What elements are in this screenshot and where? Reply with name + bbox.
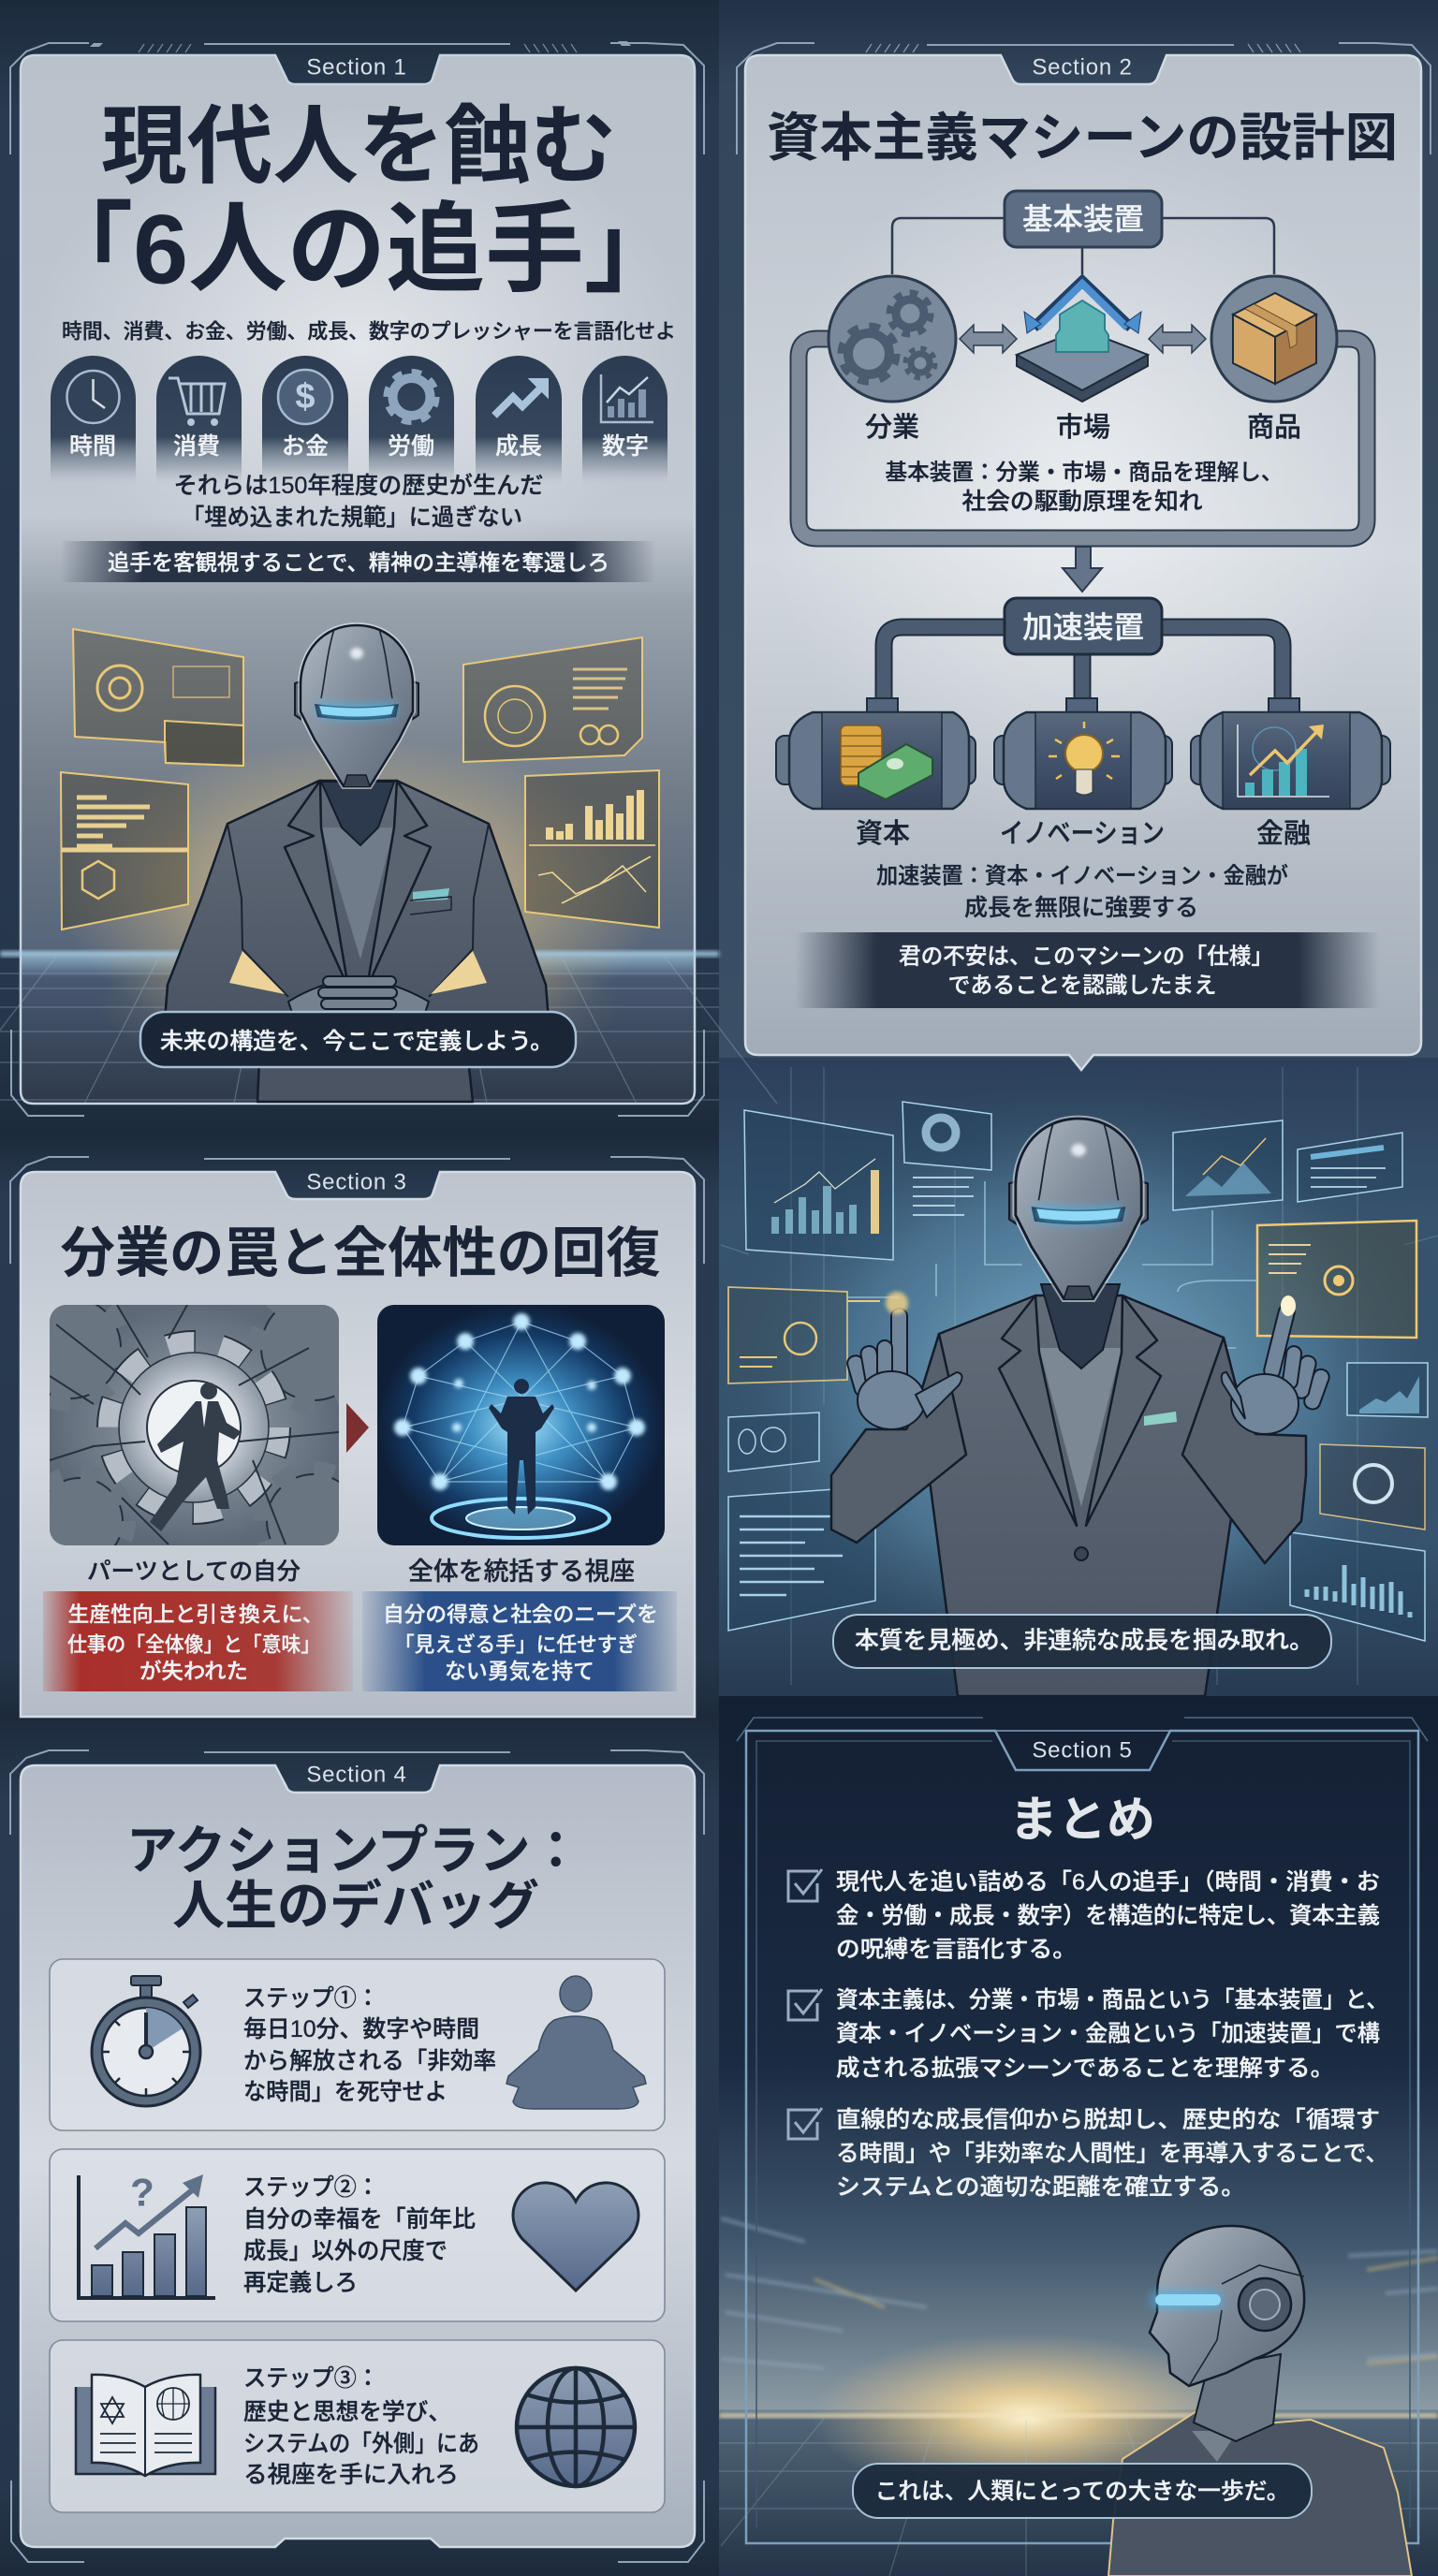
red message box bbox=[43, 1591, 353, 1691]
step 2 text: 再定義しろ bbox=[243, 2270, 358, 2296]
subtitle: 時間、消費、お金、労働、成長、数字のプレッシャーを言語化せよ bbox=[62, 320, 676, 343]
summary 3 bbox=[788, 2106, 1388, 2200]
pursuer: numbers bbox=[582, 356, 668, 487]
caption pill bbox=[853, 2464, 1312, 2518]
step 2 text: 自分の幸福を「前年比 bbox=[243, 2206, 476, 2232]
step 3 text: る視座を手に入れろ bbox=[243, 2462, 459, 2488]
section 3 frame bbox=[10, 1157, 704, 1264]
section 5 title: まとめ bbox=[1009, 1793, 1155, 1848]
head bbox=[1150, 2226, 1304, 2386]
red message box: 仕事の「全体像」と「意味」 bbox=[67, 1632, 320, 1657]
fingertip glows bbox=[886, 1292, 908, 1314]
robot hands bbox=[845, 1292, 1331, 1434]
step 3 text: ステップ③： bbox=[243, 2365, 379, 2392]
section 4 frame bbox=[10, 1750, 704, 2562]
visor bbox=[1152, 2293, 1222, 2306]
step 3 text bbox=[243, 2365, 479, 2488]
scene: robot pointing at dashboards bbox=[688, 1067, 1438, 1704]
summary 1 text bbox=[836, 1868, 1380, 1962]
base device label bbox=[1005, 191, 1162, 247]
holo panel top left bbox=[73, 629, 243, 766]
step 2 bbox=[50, 2149, 665, 2321]
summary 1 text: の呪縛を言語化する。 bbox=[836, 1936, 1077, 1962]
data streams bbox=[721, 1067, 1438, 1685]
section 1 card bbox=[21, 55, 695, 1104]
accelerator label bbox=[1005, 598, 1162, 654]
step 1 text: から解放される「非効率 bbox=[243, 2048, 496, 2074]
dark banner: 追手を客観視することで、精神の主導権を奪還しろ bbox=[108, 550, 609, 575]
accelerator names: 金融 bbox=[1256, 818, 1311, 849]
cylinder: capital bbox=[776, 698, 976, 809]
accelerator label: 加速装置 bbox=[1022, 610, 1144, 644]
step 3 bbox=[50, 2340, 665, 2512]
summary 3 text bbox=[836, 2106, 1388, 2200]
horizon bbox=[719, 2413, 1438, 2418]
checkbox bbox=[788, 1989, 822, 2020]
raised right arm bbox=[1182, 1338, 1306, 1563]
icon: open book bbox=[76, 2375, 215, 2476]
section 1 frame bbox=[10, 41, 704, 1116]
summary 2 text: 資本主義は、分業・市場・商品という「基本装置」と、 bbox=[836, 1986, 1388, 2012]
pursuer: labor: 労働 bbox=[388, 433, 434, 460]
section label: Section 2 bbox=[1032, 54, 1133, 80]
dashboard: dial bbox=[1320, 1444, 1425, 1530]
section label: Section 1 bbox=[306, 54, 407, 80]
section 5 frame bbox=[737, 1718, 1428, 2543]
section 3 panel bbox=[10, 1157, 704, 1717]
base device description: 社会の駆動原理を知れ bbox=[962, 489, 1202, 515]
dashboard: bar chart bbox=[744, 1110, 893, 1260]
pursuer: time: 時間 bbox=[69, 433, 116, 460]
summary 3 text: る時間」や「非効率な人間性」を再導入することで、 bbox=[836, 2140, 1388, 2166]
section 4 title: アクションプラン： bbox=[126, 1822, 581, 1880]
right hand bbox=[1222, 1303, 1331, 1434]
blue message box: 自分の得意と社会のニーズを bbox=[383, 1603, 658, 1627]
caption pill bbox=[833, 1615, 1331, 1668]
pocket bbox=[410, 897, 451, 915]
section 4 card bbox=[21, 1765, 695, 2547]
caption pill: 本質を見極め、非連続な成長を掴み取れ。 bbox=[855, 1628, 1313, 1654]
icon: stopwatch bbox=[92, 1976, 200, 2106]
division of labor icon bbox=[829, 276, 956, 402]
summary 1 text: 現代人を追い詰める「6人の追手」（時間・消費・お bbox=[836, 1868, 1380, 1895]
blue message box: ない勇気を持て bbox=[445, 1659, 594, 1683]
dashboard: spark bbox=[1347, 1363, 1428, 1417]
summary 3 text: 直線的な成長信仰から脱却し、歴史的な「循環す bbox=[836, 2106, 1380, 2132]
dashboard: donut bbox=[902, 1102, 991, 1170]
section 3 title: 分業の罠と全体性の回復 bbox=[60, 1222, 660, 1284]
base device names: 商品 bbox=[1247, 412, 1301, 443]
dark banner bbox=[60, 541, 655, 582]
holo panel top right bbox=[463, 637, 642, 762]
pursuer: labor bbox=[369, 356, 454, 487]
section 4 panel bbox=[10, 1750, 704, 2562]
accelerator description: 成長を無限に強要する bbox=[964, 895, 1198, 921]
section 1 light bloom bbox=[32, 103, 687, 590]
base device names bbox=[865, 412, 1301, 443]
neck bbox=[321, 782, 394, 845]
section 4 title: 人生のデバッグ bbox=[172, 1876, 539, 1936]
icon: growth chart: ? bbox=[130, 2170, 154, 2215]
robot presenter bbox=[165, 625, 549, 1102]
jacket button bbox=[1075, 1547, 1088, 1560]
image: global network bbox=[377, 1305, 665, 1545]
icon: growth chart bbox=[79, 2170, 215, 2298]
summary 2 text: 成される拡張マシーンであることを理解する。 bbox=[836, 2056, 1334, 2082]
goods icon bbox=[1211, 276, 1337, 402]
accelerator names: イノベーション bbox=[1000, 819, 1165, 849]
red message box: が失われた bbox=[139, 1659, 248, 1683]
base device names: 分業 bbox=[865, 412, 919, 443]
section 2 banner: 君の不安は、このマシーンの「仕様」 bbox=[899, 944, 1273, 970]
man bbox=[150, 1383, 242, 1531]
accelerator description bbox=[876, 863, 1288, 921]
pursuer: time bbox=[51, 356, 136, 487]
raised left arm bbox=[831, 1334, 966, 1543]
step 3 text: 歴史と思想を学び、 bbox=[243, 2399, 451, 2425]
summary 3 text: システムとの適切な距離を確立する。 bbox=[836, 2174, 1245, 2200]
pursuer: consumption: 消費 bbox=[173, 433, 220, 460]
warm floor reflection bbox=[97, 931, 622, 1081]
blue message box: 「見えざる手」に任せすぎ bbox=[394, 1632, 638, 1657]
sunrise bbox=[822, 2338, 1202, 2466]
floor grid bbox=[719, 2419, 1438, 2576]
lapels bbox=[999, 1295, 1161, 1526]
step 1 text: 毎日10分、数字や時間 bbox=[243, 2016, 479, 2042]
connector lines bbox=[847, 1181, 1257, 1348]
checkbox bbox=[788, 2108, 822, 2139]
checkbox bbox=[788, 1869, 822, 1901]
left caption: パーツとしての自分 bbox=[87, 1559, 301, 1585]
summary 2 bbox=[788, 1986, 1388, 2082]
cracks bbox=[50, 1305, 339, 1544]
base device label: 基本装置 bbox=[1022, 202, 1144, 236]
section label: Section 3 bbox=[306, 1170, 407, 1194]
section 2 title: 資本主義マシーンの設計図 bbox=[767, 109, 1398, 167]
base device connectors bbox=[892, 218, 1274, 274]
step 1 text bbox=[243, 1985, 496, 2105]
blue message box bbox=[362, 1591, 677, 1691]
pursuer: money bbox=[262, 356, 348, 487]
double arrows bbox=[960, 325, 1206, 353]
summary 1 text: 金・労働・成長・数字）を構造的に特定し、資本主義 bbox=[836, 1902, 1380, 1928]
section 2 panel bbox=[737, 43, 1431, 1070]
arm seams bbox=[227, 824, 489, 997]
section 2 banner bbox=[795, 932, 1380, 1008]
jacket bbox=[1108, 2403, 1412, 2576]
section 1 title: 「6人の追手」 bbox=[34, 195, 683, 305]
warm gaps under arms bbox=[229, 951, 487, 994]
section 2 frame bbox=[737, 43, 1431, 154]
left hand bbox=[845, 1309, 962, 1429]
accelerator names: 資本 bbox=[856, 818, 910, 849]
section 2 banner: であることを認識したまえ bbox=[947, 973, 1217, 998]
dashboard: table bbox=[1298, 1133, 1402, 1202]
neck bbox=[1194, 2354, 1281, 2441]
accelerator description: 加速装置：資本・イノベーション・金融が bbox=[876, 863, 1288, 889]
base device description: 基本装置：分業・市場・商品を理解し、 bbox=[886, 461, 1283, 485]
accelerator pipes bbox=[884, 627, 1283, 702]
right caption: 全体を統括する視座 bbox=[408, 1558, 635, 1586]
section 4 title bbox=[126, 1822, 581, 1936]
dashboard: code bbox=[728, 1486, 875, 1631]
accelerator names bbox=[856, 818, 1311, 849]
pocket square bbox=[1144, 1412, 1177, 1426]
summary 2 text: 資本・イノベーション・金融という「加速装置」で構 bbox=[836, 2020, 1380, 2046]
shirt bbox=[1192, 2431, 1238, 2462]
cylinder: finance bbox=[1191, 698, 1390, 809]
section 5 background bbox=[719, 1696, 1438, 2576]
warm glow behind robot bbox=[60, 739, 659, 1058]
central gear bbox=[109, 1342, 279, 1513]
base device names: 市場 bbox=[1056, 412, 1110, 443]
section 1 title: 現代人を蝕む bbox=[101, 99, 616, 195]
step 3 text: システムの「外側」にあ bbox=[243, 2431, 479, 2457]
section label: Section 5 bbox=[1032, 1737, 1133, 1764]
arrow bbox=[346, 1403, 369, 1453]
robot suit bbox=[831, 1284, 1306, 1696]
market icon bbox=[1017, 281, 1148, 402]
holo panel bottom right bbox=[525, 770, 659, 928]
six pursuers row bbox=[51, 356, 668, 487]
corner gears bbox=[50, 1305, 339, 1545]
dashboard: golden left bbox=[728, 1287, 880, 1383]
section 2 light bloom bbox=[764, 131, 1401, 842]
section 1 title bbox=[34, 99, 683, 305]
history text: 「埋め込まれた規範」に過ぎない bbox=[182, 505, 522, 531]
loop pipe bbox=[799, 339, 1367, 538]
step 1 bbox=[50, 1959, 665, 2130]
pursuer: growth bbox=[476, 356, 562, 487]
clasped hands bbox=[288, 976, 429, 1018]
icon: heart bbox=[513, 2183, 638, 2291]
shirt bbox=[1039, 1348, 1122, 1507]
horizon and floor grid bbox=[0, 951, 777, 1104]
step 1 text: な時間」を死守せよ bbox=[243, 2079, 448, 2105]
history text bbox=[174, 473, 543, 531]
data streaks bbox=[721, 2218, 1438, 2368]
holo panel bottom left bbox=[61, 772, 188, 929]
pursuer: numbers: 数字 bbox=[602, 433, 649, 460]
dashboard: lower right bars bbox=[1290, 1532, 1425, 1641]
step 1 text: ステップ①： bbox=[243, 1985, 379, 2012]
section 3 card bbox=[21, 1172, 695, 1717]
pocket square bbox=[413, 888, 449, 901]
robot jacket and arms bbox=[165, 781, 549, 1102]
robot head bbox=[295, 625, 418, 786]
dashboard: mountain chart bbox=[1173, 1120, 1283, 1210]
red message box: 生産性向上と引き換えに、 bbox=[67, 1603, 324, 1627]
icon: globe bbox=[517, 2368, 635, 2486]
image: trapped in gears bbox=[50, 1305, 339, 1545]
dashboard: golden panel bbox=[1257, 1221, 1416, 1338]
flow arrow bbox=[1063, 547, 1102, 592]
pursuer: consumption bbox=[156, 356, 242, 487]
cylinder: innovation bbox=[994, 698, 1172, 809]
lapels bbox=[285, 781, 431, 988]
caption pill bbox=[140, 1012, 576, 1067]
pursuer: money: お金 bbox=[282, 433, 329, 460]
robot head bbox=[1009, 1119, 1148, 1299]
icon: meditation bbox=[506, 1976, 646, 2109]
golden holo panels bbox=[61, 629, 659, 929]
section 1 panel bbox=[0, 41, 777, 1116]
robot in profile bbox=[1108, 2226, 1412, 2576]
dashboards bbox=[728, 1102, 1428, 1641]
neck bbox=[1041, 1284, 1120, 1368]
section 2 card bbox=[745, 55, 1421, 1070]
step 2 text bbox=[243, 2174, 476, 2296]
helmet seam bbox=[1189, 2265, 1304, 2386]
summary 2 text bbox=[836, 1986, 1388, 2082]
caption pill: これは、人類にとっての大きな一歩だ。 bbox=[874, 2479, 1290, 2505]
history text: それらは150年程度の歴史が生んだ bbox=[174, 473, 543, 499]
ear module bbox=[1239, 2278, 1291, 2331]
caption pill: 未来の構造を、今ここで定義しよう。 bbox=[160, 1028, 553, 1054]
step 2 text: ステップ②： bbox=[243, 2174, 379, 2201]
shirt bbox=[321, 827, 394, 959]
summary 1 bbox=[788, 1868, 1380, 1962]
dashboard: text block bbox=[913, 1178, 974, 1215]
step 2 text: 成長」以外の尺度で bbox=[243, 2238, 448, 2264]
pursuer: money: $ bbox=[295, 377, 315, 417]
section label: Section 4 bbox=[306, 1762, 407, 1788]
scene glow bbox=[688, 1067, 1438, 1704]
dashboard: small left bbox=[728, 1412, 819, 1471]
pursuer: growth: 成長 bbox=[495, 433, 542, 460]
section 5 panel bbox=[719, 1696, 1438, 2576]
base device description bbox=[886, 461, 1283, 515]
